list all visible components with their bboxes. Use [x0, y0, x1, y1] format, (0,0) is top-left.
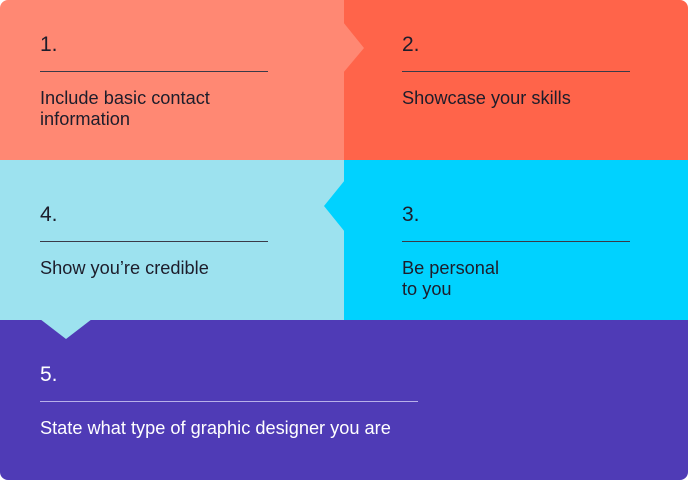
- number 4: 4.: [40, 203, 58, 226]
- text 3: to you: [402, 279, 452, 299]
- arrow 1 to 2: [343, 22, 364, 73]
- panel 2: [344, 0, 688, 160]
- text 1: information: [40, 109, 130, 129]
- panel 4: [0, 160, 344, 320]
- number 5: 5.: [40, 363, 58, 386]
- text 2: Showcase your skills: [402, 88, 571, 108]
- text 1: Include basic contact: [40, 88, 210, 108]
- number 1: 1.: [40, 33, 58, 56]
- text 4: Show you’re credible: [40, 258, 209, 278]
- arrow 4 to 5: [40, 319, 92, 339]
- arrow 3 to 4: [324, 180, 345, 232]
- panel 3: [344, 160, 688, 320]
- text 5: State what type of graphic designer you are: [40, 418, 391, 438]
- number 2: 2.: [402, 33, 420, 56]
- text 3: Be personal: [402, 258, 499, 278]
- text 1: [40, 88, 210, 129]
- panel 1: [0, 0, 344, 160]
- text 3: [402, 258, 499, 299]
- panel 5: [0, 320, 688, 480]
- number 3: 3.: [402, 203, 420, 226]
